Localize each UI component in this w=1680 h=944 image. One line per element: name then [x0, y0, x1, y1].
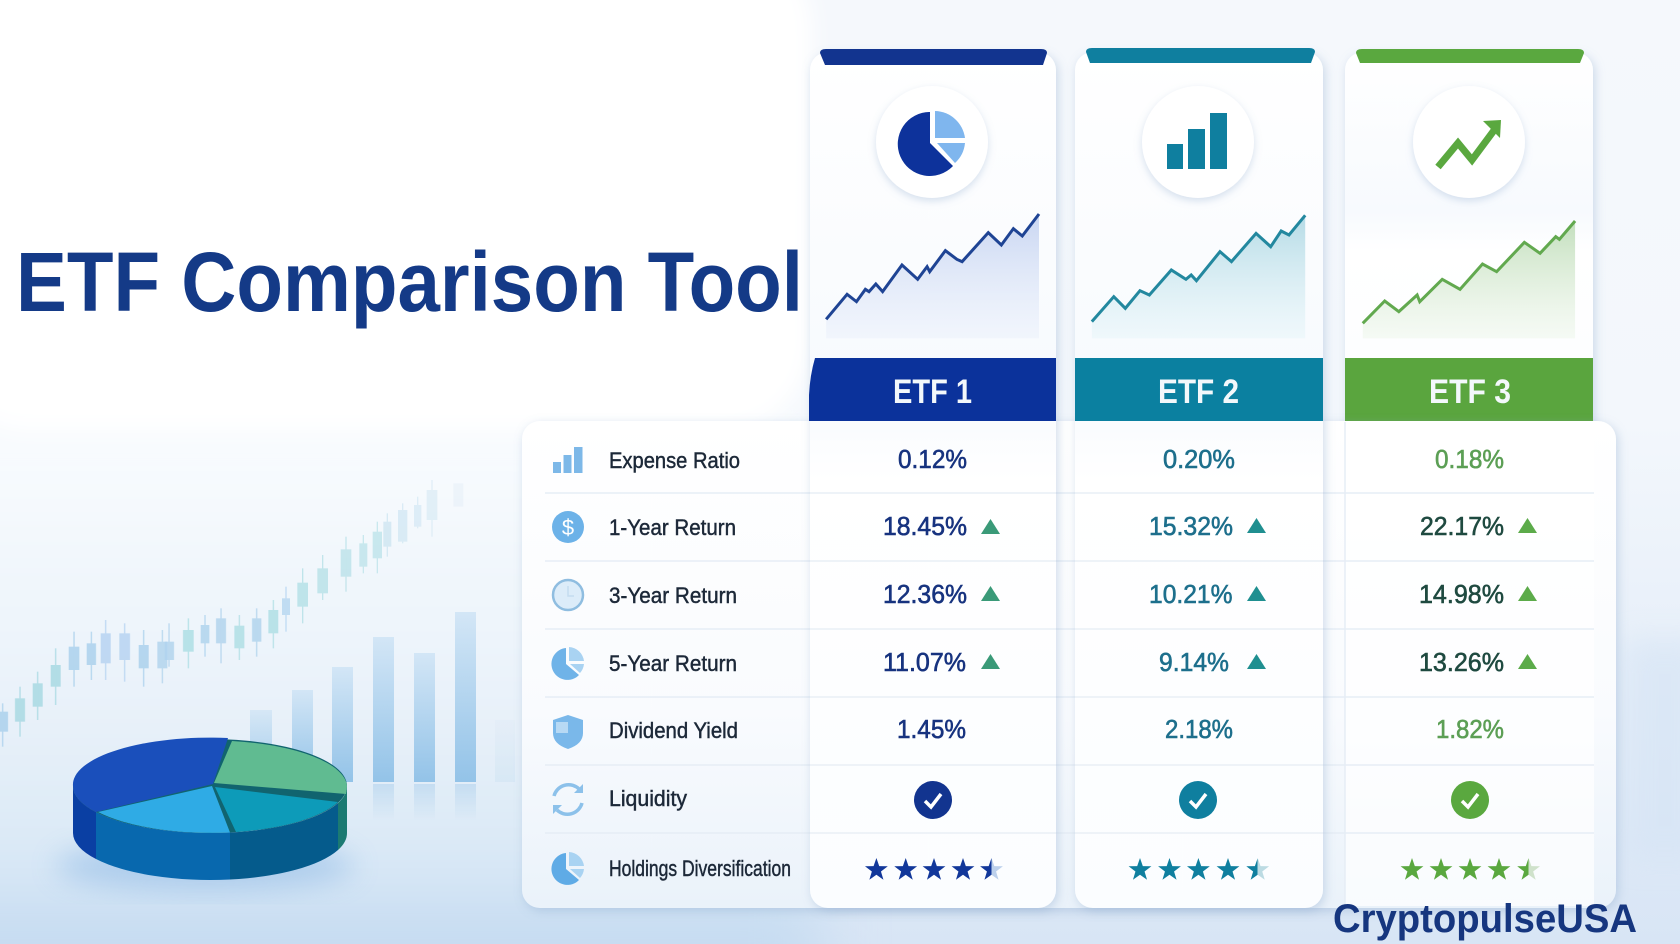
- icon: pie: [551, 852, 584, 885]
- icon: shield: [553, 715, 583, 749]
- row: Expense Ratio: [553, 444, 1504, 474]
- panel: comparison table: [522, 421, 1616, 908]
- row: Holdings Diversification: [551, 852, 1540, 885]
- check ETF 2: [1179, 781, 1217, 819]
- row: Dividend Yield: Dividend Yield: [609, 718, 738, 743]
- top accent bar 3: [1356, 49, 1584, 63]
- row: 1-Year Return: 1-Year Return: [609, 515, 736, 540]
- row: 3-Year Return: 10.21%: [1149, 579, 1232, 609]
- row: Expense Ratio: Expense Ratio: [609, 448, 740, 473]
- row dividers: [545, 422, 1594, 906]
- icon: dollar: [552, 511, 584, 543]
- icon: dollar: $: [562, 515, 574, 540]
- panel: ETF 2 column: [1075, 48, 1323, 908]
- rating ETF 2: [1129, 858, 1269, 880]
- row: Holdings Diversification: Holdings Diversification: [609, 856, 791, 881]
- icon circle: pie: [876, 86, 988, 198]
- background candlestick chart: [0, 480, 463, 747]
- rating ETF 3: [1401, 858, 1540, 880]
- sparkline ETF 1: [826, 214, 1039, 338]
- panel: ETF 1 column: [809, 49, 1056, 908]
- row: Dividend Yield: 1.82%: [1436, 714, 1504, 744]
- row: Liquidity: Liquidity: [609, 786, 687, 811]
- column heading: ETF 3: [1429, 373, 1511, 411]
- column heading: ETF 2: [1158, 373, 1239, 411]
- sparkline ETF 3: [1363, 221, 1575, 338]
- 3D pie chart: [55, 738, 355, 890]
- row: 1-Year Return: [552, 511, 1537, 543]
- row: 5-Year Return: 13.26%: [1419, 647, 1504, 677]
- rating ETF 1: [865, 858, 1003, 880]
- icon circle: arrow: [1413, 86, 1525, 198]
- row: Expense Ratio: 0.20%: [1163, 444, 1235, 474]
- watermark: CryptopulseUSA: [1333, 897, 1637, 941]
- icon: pie: [551, 647, 584, 680]
- row: 1-Year Return: 22.17%: [1420, 511, 1504, 541]
- row: 5-Year Return: [551, 647, 1537, 680]
- top accent bar 1: [820, 49, 1047, 65]
- icon circle: bars: [1142, 86, 1254, 198]
- row: 3-Year Return: 14.98%: [1419, 579, 1504, 609]
- row: Expense Ratio: 0.18%: [1435, 444, 1504, 474]
- row: 5-Year Return: 5-Year Return: [609, 651, 737, 676]
- check ETF 1: [914, 781, 952, 819]
- row: 3-Year Return: 12.36%: [883, 579, 967, 609]
- row: 5-Year Return: 9.14%: [1159, 647, 1229, 677]
- icon: refresh: [553, 784, 583, 814]
- row: Liquidity: [553, 781, 1489, 819]
- top accent bar 2: [1086, 48, 1315, 63]
- title: ETF Comparison Tool: [16, 235, 803, 329]
- header band ETF 3: [1345, 358, 1593, 424]
- panel: ETF 3 column: [1345, 49, 1593, 452]
- row: Expense Ratio: 0.12%: [898, 444, 967, 474]
- header band ETF 2: [1075, 358, 1323, 421]
- sparkline ETF 2: [1092, 215, 1305, 338]
- background bar chart: [250, 612, 515, 820]
- row: Dividend Yield: 2.18%: [1165, 714, 1233, 744]
- column heading: ETF 1: [893, 373, 972, 411]
- row: 1-Year Return: 18.45%: [883, 511, 967, 541]
- row: 1-Year Return: 15.32%: [1149, 511, 1233, 541]
- check ETF 3: [1451, 781, 1489, 819]
- row: 3-Year Return: [553, 579, 1537, 610]
- row: 5-Year Return: 11.07%: [883, 647, 966, 677]
- header band ETF 1: [809, 358, 1056, 421]
- icon: bars: [553, 447, 582, 473]
- row: 3-Year Return: 3-Year Return: [609, 583, 737, 608]
- icon: clock: [553, 580, 583, 610]
- row: Dividend Yield: 1.45%: [897, 714, 966, 744]
- row: Dividend Yield: [553, 714, 1504, 749]
